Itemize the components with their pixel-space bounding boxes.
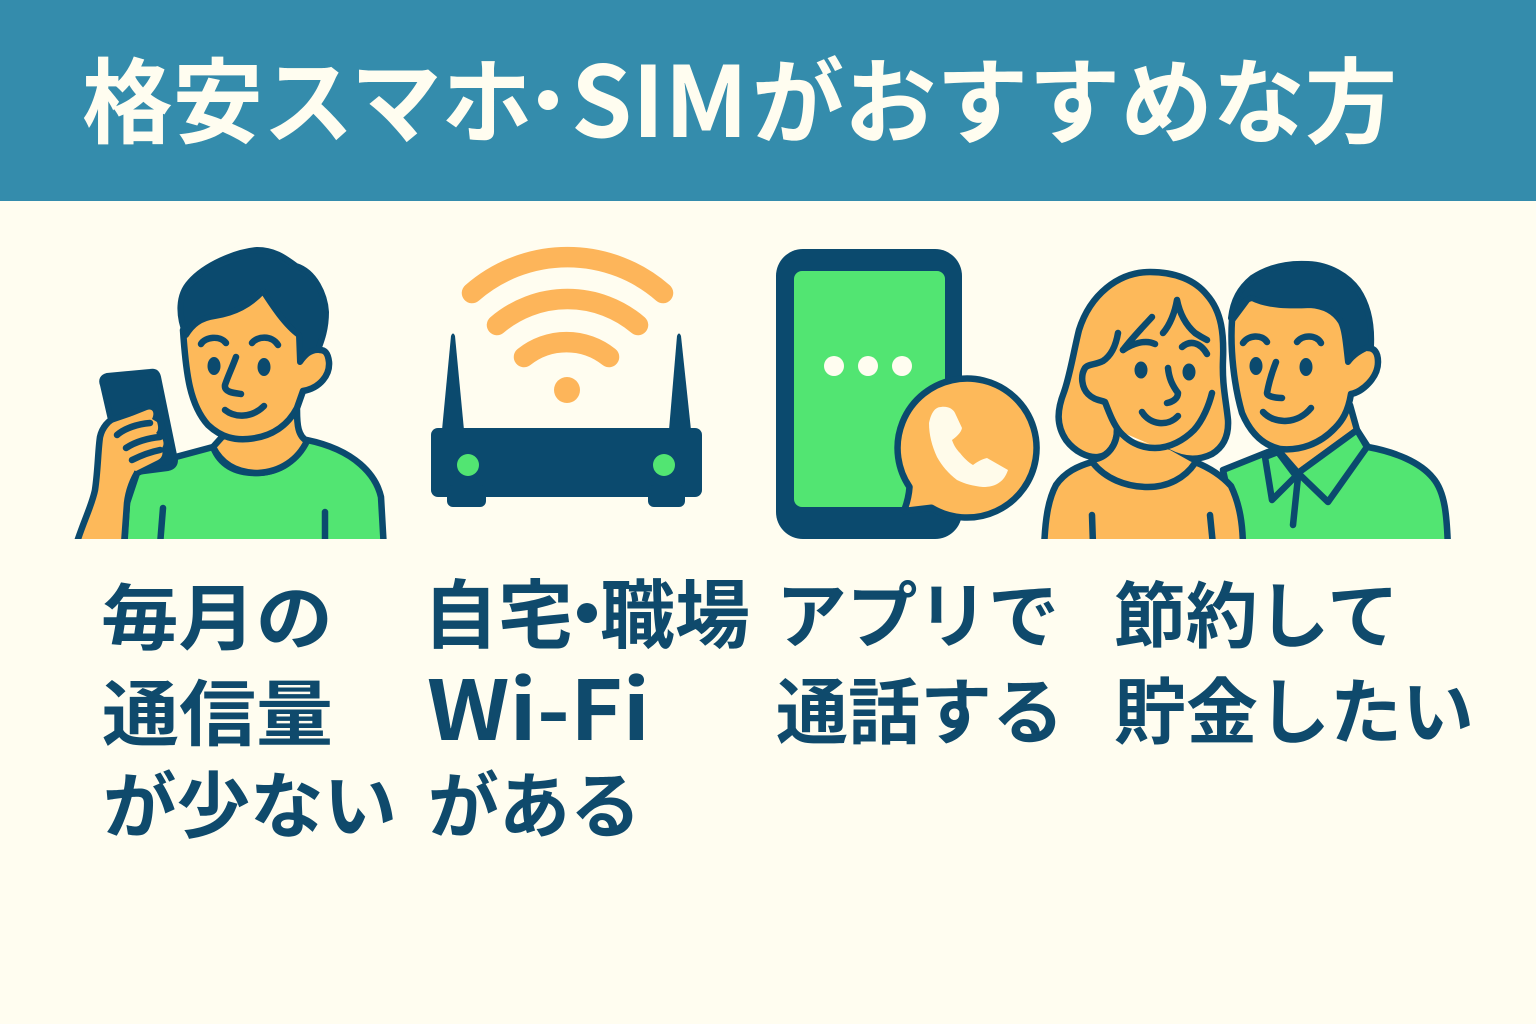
label: has wifi: 職場 bbox=[600, 555, 750, 664]
label: save money: 貯金したい bbox=[1114, 654, 1474, 759]
label: has wifi bbox=[423, 555, 750, 853]
title: がおすすめな方 bbox=[752, 28, 1397, 163]
shirt bbox=[124, 440, 384, 550]
label: save money: 節約して bbox=[1114, 558, 1399, 663]
title bbox=[82, 24, 1397, 166]
icon: man looking at smartphone bbox=[76, 250, 384, 550]
header banner bbox=[0, 0, 1536, 201]
neck bbox=[213, 410, 307, 473]
label: few data: が少ない bbox=[103, 748, 397, 853]
shirt creases bbox=[160, 508, 325, 545]
label: has wifi: Wi-Fi bbox=[427, 645, 650, 764]
woman's neck bbox=[1093, 430, 1195, 487]
woman's hair bbox=[1059, 272, 1228, 459]
man's collar bbox=[1265, 430, 1367, 525]
icon: smartphone with call bubble bbox=[776, 249, 1037, 539]
label: few data: 毎月の bbox=[101, 560, 333, 665]
label: few data bbox=[101, 560, 397, 853]
man's head bbox=[1231, 285, 1378, 449]
title: SIM bbox=[571, 24, 748, 166]
man's neck bbox=[1278, 405, 1357, 473]
woman's face bbox=[1082, 300, 1212, 448]
call bubble bbox=[898, 379, 1037, 518]
man's shirt bbox=[1223, 430, 1448, 550]
label: has wifi: がある bbox=[428, 748, 641, 853]
head bbox=[183, 290, 329, 439]
phone in hand bbox=[102, 372, 175, 472]
arm and hand bbox=[74, 414, 140, 539]
woman's creases bbox=[1092, 515, 1213, 545]
man's hair bbox=[1231, 264, 1371, 362]
label: app calls: アプリで bbox=[776, 558, 1059, 663]
man's face details bbox=[1243, 336, 1321, 421]
title: 格安スマホ bbox=[82, 28, 532, 163]
wifi waves bbox=[472, 257, 663, 403]
label: has wifi: 自宅 bbox=[423, 555, 573, 664]
label: few data: 通信量 bbox=[102, 656, 333, 761]
label: save money bbox=[1114, 558, 1474, 759]
face details bbox=[201, 338, 278, 416]
icon: couple bbox=[1044, 264, 1448, 550]
phone bbox=[776, 249, 962, 539]
label: app calls bbox=[776, 558, 1064, 759]
hair bbox=[180, 250, 326, 362]
woman's body bbox=[1044, 462, 1243, 550]
fingers bbox=[112, 410, 164, 471]
label: app calls: 通話する bbox=[776, 654, 1064, 759]
icon: wifi router bbox=[431, 257, 702, 507]
handset bbox=[929, 407, 1008, 487]
router body bbox=[431, 334, 702, 507]
